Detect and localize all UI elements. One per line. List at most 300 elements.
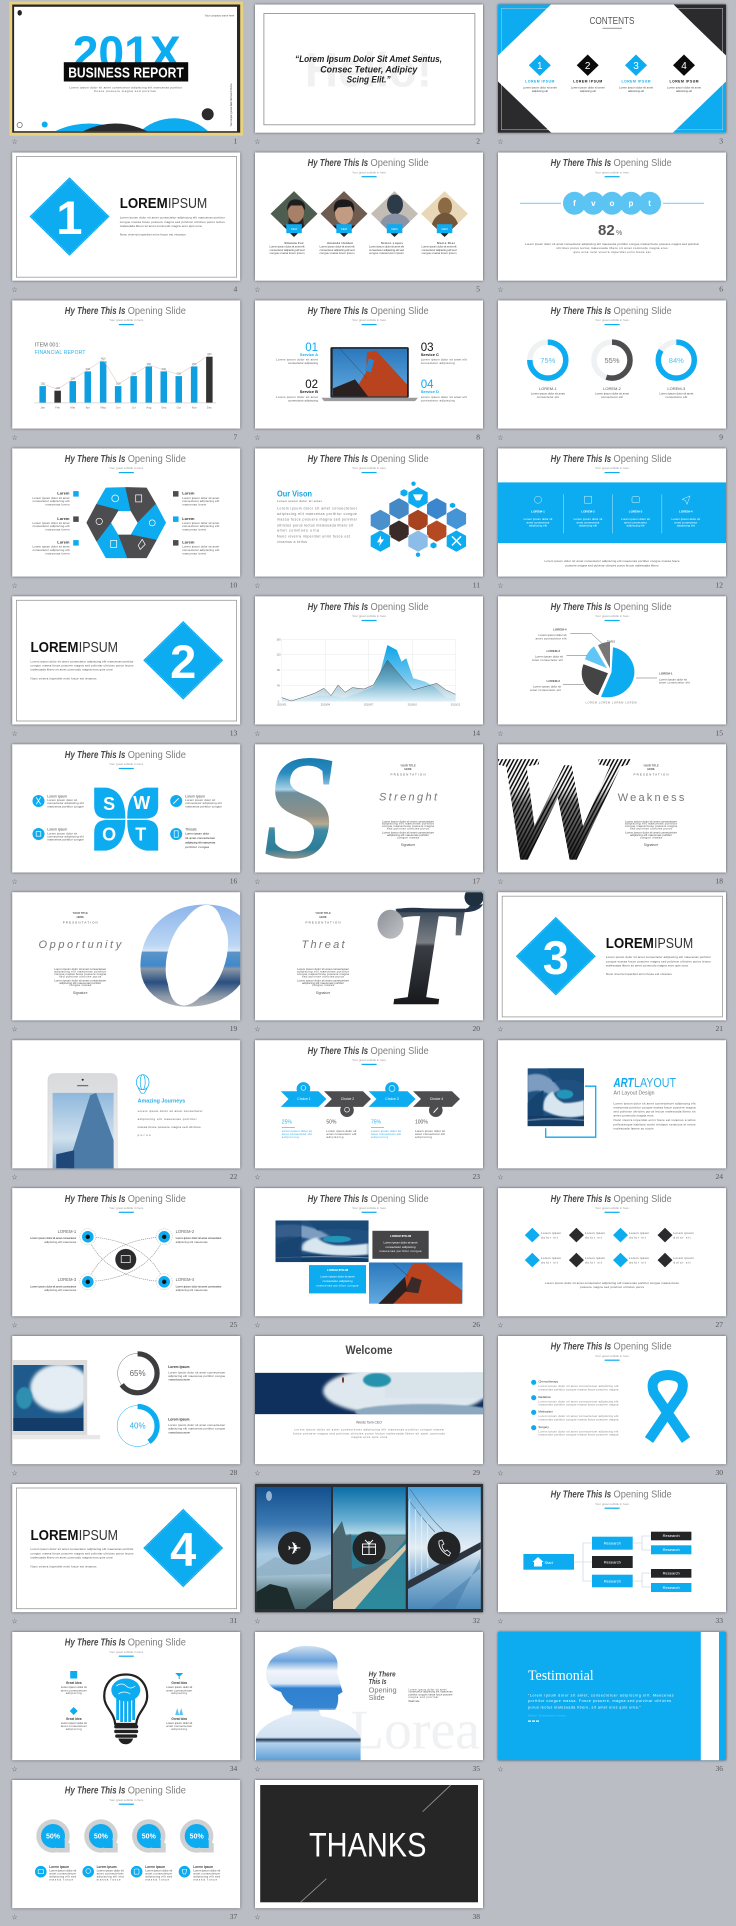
slide number: ☆ — [497, 434, 504, 442]
section text: malesuada libero sit amet commodo magna eros quis urna — [30, 1555, 113, 1559]
right labels: maecenas lorem — [182, 551, 207, 555]
slide number: ☆ — [497, 286, 504, 294]
description: Lorem ipsum dolor sit amet consectetur adipiscing elit maecenas porttitor congue massa fusce posuere magna sed pulvinar — [525, 242, 699, 246]
slide number: 16 — [230, 876, 237, 885]
body text: Lorem ipsum dolor sit amet — [408, 1687, 447, 1691]
section title — [30, 1527, 118, 1544]
art layout title: ART — [613, 1075, 634, 1090]
service 02: 02 — [305, 379, 318, 391]
laptop with bridge photo — [322, 347, 418, 401]
item 4: Lorem Ipsum — [193, 1865, 213, 1869]
slide number: ☆ — [11, 434, 18, 442]
threats item: Threats — [185, 827, 197, 831]
heading: Opening Slide — [370, 1193, 429, 1205]
slide number: 27 — [716, 1320, 723, 1329]
item 2: Lorem Ipsum — [97, 1865, 117, 1869]
area chart: 2010/07 — [364, 702, 374, 706]
label lorem 2: LOREM-2 — [176, 1229, 195, 1234]
slide sheet — [255, 744, 483, 872]
title: Opening — [369, 1686, 397, 1694]
feature text: massa fusce posuere magna sed ultricies — [138, 1125, 201, 1129]
step 25 percent: amet consectetur elit — [282, 1132, 312, 1136]
donut labels: consectetur elit — [665, 395, 687, 399]
donut labels: consectetur elit — [537, 395, 559, 399]
social circles: o — [610, 199, 615, 208]
step 75 percent: amet consectetur elit — [371, 1132, 401, 1136]
quote text: porttitor congue massa. Fusce posuere, magna sed pulvinar ultricies — [528, 1699, 671, 1703]
phone mockup — [48, 1074, 117, 1168]
contents item 3: 3 — [633, 61, 639, 72]
chevron process: Choice 4 — [430, 1097, 443, 1101]
slide number: 12 — [716, 580, 723, 589]
hexagon icons — [96, 495, 155, 549]
idea bottom right: Lorem ipsum dolor sit — [166, 1721, 192, 1725]
member text 4: congue massa lorem ipsum — [422, 251, 457, 255]
donut labels — [531, 386, 693, 399]
quote: Consec Tetuer, Adipicy — [320, 64, 418, 74]
body text: sed pulvinar ultricies purus — [387, 827, 430, 831]
portrait 4 — [421, 191, 468, 234]
body text — [625, 819, 677, 847]
swot letters: O — [102, 825, 116, 845]
slide 6: social percentage — [497, 152, 726, 294]
callout lorem 1: Lorem ipsum dolor sit — [659, 677, 687, 681]
treatment item 3: Lorem ipsum dolor sit amet consectetuer adipiscing elit — [538, 1414, 619, 1418]
slide sheet — [12, 448, 240, 577]
heading: Hy There This Is — [308, 305, 368, 317]
big photo letter T: T — [383, 874, 465, 1036]
idea bottom left — [61, 1707, 87, 1731]
slide number — [254, 1172, 480, 1182]
callout lorem 3: LOREM-3 — [546, 649, 560, 653]
item 4 — [179, 1865, 221, 1881]
contents item 1: Lorem ipsum dolor sit amet — [523, 86, 557, 90]
slide sheet — [12, 892, 240, 1020]
big photo letter O — [140, 904, 240, 1007]
service 02: consectetur adipiscing — [288, 399, 318, 403]
bubble 2 — [84, 1819, 118, 1853]
slide number: 31 — [230, 1616, 237, 1625]
body text: congue massa fusce posuere magna — [297, 972, 349, 976]
idea top right — [166, 1673, 192, 1695]
ring text 2 — [168, 1418, 226, 1434]
slide number: ☆ — [497, 582, 504, 590]
item 1: Lorem Ipsum — [49, 1865, 69, 1869]
body text — [297, 967, 349, 995]
slide number — [11, 1764, 237, 1774]
treatment item 4: Surgery — [538, 1425, 549, 1429]
phone icon — [428, 1532, 460, 1564]
item 2: amet consectetuer — [97, 1872, 124, 1876]
number diamond — [143, 1509, 223, 1587]
slide 34: light bulb ideas — [11, 1632, 240, 1774]
research boxes right — [651, 1532, 691, 1592]
footnote — [544, 559, 680, 567]
slide number: ☆ — [11, 878, 18, 886]
slide number — [254, 284, 480, 294]
slide number — [497, 580, 723, 590]
donut labels: LOREM-2 — [603, 386, 622, 391]
section text: Lorem ipsum dolor sit amet consectetur adipiscing elit maecenas porttitor — [30, 1547, 133, 1551]
label lorem 1: Lorem ipsum dolor sit amet consectetur — [30, 1236, 76, 1240]
heading: Opening Slide — [128, 749, 186, 761]
slide 30: ribbon — [497, 1336, 726, 1478]
item 2: massa fusce — [97, 1877, 121, 1881]
slide number: ☆ — [254, 1766, 261, 1774]
treatment item 2: Lorem ipsum dolor sit amet consectetuer adipiscing elit — [538, 1399, 619, 1403]
contents item 3: LOREM IPSUM — [622, 80, 651, 84]
body text: adipiscing elit maecenas porttitor — [387, 833, 429, 837]
item 2: adipiscing elit sed — [97, 1874, 124, 1878]
contents item 3: adipiscing elit — [628, 89, 644, 93]
dark caption box — [372, 1231, 429, 1259]
chevron process: Choice 3 — [385, 1097, 399, 1101]
body text: congue massa — [397, 835, 419, 839]
testimonial heading: Testimonial — [528, 1668, 594, 1684]
slide sheet — [12, 1336, 240, 1464]
slide number: ☆ — [11, 1618, 18, 1626]
area chart: 2010/04 — [321, 702, 331, 706]
threats item: adipiscing elit maecenas — [185, 841, 216, 845]
slide sheet — [12, 596, 240, 724]
section title: IPSUM — [654, 935, 693, 952]
bar chart: 300 — [85, 367, 91, 371]
slide 22: phone — [11, 1040, 240, 1182]
body text: Lorem ipsum dolor sit amet consectetuer — [625, 819, 677, 823]
heading — [308, 305, 429, 325]
blue bracket — [546, 1086, 596, 1137]
chart title: FINANCIAL REPORT — [35, 350, 85, 356]
label lorem 4: Lorem ipsum dolor sit amet consectetur — [176, 1284, 222, 1288]
callout lorem 2: Lorem ipsum dolor sit — [533, 685, 561, 689]
threats item: porttitor congue — [185, 845, 210, 849]
CEO tag 3: CEO — [391, 227, 398, 231]
diamond row 2: Lorem ipsum — [629, 1256, 650, 1260]
heading — [65, 1785, 186, 1805]
heading: Opening Slide — [370, 157, 429, 169]
section text: Lorem ipsum dolor sit amet consectetur adipiscing elit maecenas porttitor — [606, 955, 711, 959]
body text: congue massa fusce posuere magna — [54, 972, 107, 976]
slide sheet — [255, 1632, 483, 1760]
idea top right: Lorem ipsum dolor sit — [166, 1685, 192, 1689]
bar chart: Feb — [55, 406, 61, 410]
right labels: maecenas lorem — [182, 528, 207, 532]
social circles — [563, 192, 661, 215]
title block: YOUR TITLE — [315, 911, 331, 915]
slide number: ☆ — [11, 1470, 18, 1478]
diagonal accents — [300, 1785, 451, 1902]
body text: Lorem ipsum dolor sit amet consectetuer — [382, 819, 434, 823]
idea top right: adipiscing — [171, 1691, 188, 1695]
slide number: 6 — [719, 284, 723, 294]
member text 2 — [320, 241, 355, 255]
slide 4: section one — [11, 152, 240, 294]
body text: Signature — [73, 991, 88, 995]
step 100 percent: adipiscing — [415, 1135, 432, 1139]
slide number — [254, 876, 480, 886]
slide number — [254, 136, 480, 146]
left labels: maecenas lorem — [45, 528, 70, 532]
strength item: Lorem Ipsum — [47, 794, 67, 798]
slide 32: three photo panels — [254, 1484, 483, 1626]
footnote: posuere magna sed pulvinar ultricies purus lectus malesuada libero — [566, 563, 659, 567]
band column 1: LOREM-1 — [531, 509, 545, 513]
section text: congue massa fusce posuere magna sed pulvinar ultricies purus lectus — [120, 220, 225, 224]
member text 3: congue massa lorem ipsum — [369, 251, 404, 255]
dark caption box: Lorem ipsum dolor sit amet — [384, 1240, 418, 1244]
slide number: 32 — [472, 1616, 480, 1625]
slide sheet — [255, 892, 483, 1020]
heading: Your great subtitle in here — [595, 1206, 629, 1210]
body text: sed pulvinar ultricies purus lectus malesuada libero sit — [614, 1109, 696, 1113]
heading: Hy There This Is — [308, 1045, 368, 1057]
ring 65 percent: 65% — [130, 1369, 146, 1378]
contents item 2: 2 — [585, 61, 591, 72]
quote text: purus lectus malesuada libero, sit amet eros quis urna.” — [528, 1706, 641, 1710]
slide sheet — [498, 300, 726, 429]
member text 4: Lorem ipsum dolor sit amet elit — [422, 244, 457, 248]
body text: adipiscing elit maecenas porttitor — [297, 970, 349, 974]
slide 25: crossing loops — [11, 1188, 240, 1330]
section title — [30, 639, 118, 656]
callout lorem 2: LOREM-2 — [546, 679, 560, 683]
bar chart — [34, 352, 216, 410]
slide 31: section four — [11, 1484, 240, 1626]
service 02: Lorem ipsum dolor sit amet — [276, 395, 318, 399]
item 4: adipiscing elit sed — [193, 1874, 221, 1878]
slide number: ☆ — [497, 1618, 504, 1626]
big photo letter O: O — [134, 870, 258, 1038]
slide number: ☆ — [254, 1914, 261, 1922]
keyword: Threat — [302, 939, 345, 951]
number diamond — [143, 621, 223, 700]
heading: Opening Slide — [614, 1193, 672, 1205]
pie chart: LOREM LOREM LOREM LOREM — [586, 700, 636, 704]
slide number: 2 — [476, 136, 480, 146]
right labels: Lorem — [182, 540, 195, 545]
left labels: consectetur adipiscing elit — [32, 524, 70, 528]
slide 5: team — [254, 152, 483, 294]
heading: Your great subtitle in here — [595, 1502, 629, 1506]
slide number — [497, 284, 723, 294]
item 1: adipiscing elit sed — [49, 1874, 77, 1878]
slide number — [11, 1172, 237, 1182]
title — [369, 1670, 397, 1702]
section text: malesuada libero sit amet commodo magna eros quis urna — [606, 964, 688, 968]
heading: Opening Slide — [128, 1785, 186, 1797]
research boxes right: Research — [663, 1585, 680, 1590]
donut 84 percent — [658, 342, 694, 378]
research boxes middle: Research — [604, 1540, 621, 1546]
pie chart — [582, 639, 636, 704]
chevron process — [281, 1091, 460, 1107]
CEO tag 2 — [336, 224, 352, 237]
step 25 percent — [282, 1120, 312, 1139]
ring text 1: massa fusce posuere — [168, 1378, 191, 1382]
bar chart: 100 — [55, 386, 60, 390]
step 75 percent: Lorem ipsum dolor sit — [371, 1129, 401, 1133]
band column 4: adipiscing elit — [677, 524, 695, 528]
heading: Your great subtitle in here — [109, 1650, 144, 1654]
number diamond — [516, 917, 596, 996]
contents item 1: 1 — [537, 61, 543, 72]
slide sheet — [498, 1188, 726, 1316]
treatment item 3: maecenas porttitor congue massa fusce posuere magna — [538, 1417, 619, 1421]
heading: Your great subtitle in here — [352, 318, 386, 322]
heading: Your great subtitle in here — [109, 466, 144, 470]
chevron process: Choice 1 — [297, 1097, 311, 1101]
weakness item: maecenas porttitor congue — [185, 804, 222, 808]
social circles: p — [629, 199, 634, 208]
body text: adipiscing elit maecenas porttitor — [625, 822, 677, 826]
slide number: ☆ — [254, 878, 261, 886]
title block: YOUR TITLE — [643, 763, 659, 767]
area chart: 40 — [277, 684, 280, 688]
heading: Your great subtitle in here — [352, 614, 386, 618]
slide sheet — [12, 1632, 240, 1760]
slide 19: opportunity — [10, 890, 242, 1032]
swot letters — [102, 793, 150, 845]
bar chart: 350 — [146, 362, 152, 366]
slide sheet — [12, 1484, 240, 1612]
left labels: consectetur adipiscing elit — [32, 499, 70, 503]
band column 1: Lorem ipsum dolor sit — [524, 517, 552, 521]
body text — [408, 1687, 453, 1703]
body text: Nunc viverra imperdiet enim fusce est vivamus a tellus — [614, 1118, 696, 1122]
right labels: consectetur adipiscing elit — [182, 524, 219, 528]
ring text 2: Lorem Ipsum — [168, 1418, 189, 1422]
slide sheet — [12, 1040, 240, 1168]
slide 15: pie chart — [497, 596, 726, 738]
art layout title — [613, 1075, 676, 1090]
bar chart: 450 — [207, 352, 212, 356]
slide number: 34 — [230, 1764, 237, 1773]
band column 2: amet consectetur — [576, 520, 600, 524]
contents item 3: Lorem ipsum dolor sit amet — [619, 86, 653, 90]
heading: Hy There This Is — [308, 157, 368, 169]
label lorem 3: Lorem ipsum dolor sit amet consectetur — [30, 1284, 76, 1288]
slide number: 24 — [716, 1172, 723, 1181]
contents item 4: adipiscing elit — [676, 89, 692, 93]
slide number: 1 — [233, 136, 237, 146]
idea bottom right: amet consectetuer — [166, 1724, 192, 1728]
slide sheet — [12, 744, 240, 872]
slide number: 22 — [230, 1172, 237, 1181]
section text: Nunc viverra imperdiet enim fusce est vivamus — [30, 1564, 97, 1568]
heading: Opening Slide — [128, 305, 186, 317]
slide number: 37 — [230, 1912, 237, 1921]
wave photo — [528, 1068, 584, 1126]
bar chart: 350 — [192, 362, 197, 366]
contents item 1: LOREM IPSUM — [525, 80, 554, 84]
slide sheet — [12, 1188, 240, 1316]
CEO tag 1 — [286, 224, 302, 237]
heading: Your great subtitle in here — [109, 1206, 144, 1210]
slide number — [497, 728, 723, 738]
member text 1: congue massa lorem ipsum — [270, 251, 305, 255]
slide sheet — [498, 744, 726, 872]
footnote: Lorem ipsum dolor sit amet consectetur adipiscing elit maecenas porttitor congue massa fusce — [544, 559, 680, 563]
slide number: ☆ — [254, 286, 261, 294]
heading: Your great subtitle in here — [595, 614, 629, 618]
slide 12: blue band — [497, 448, 726, 590]
connectors — [574, 1536, 651, 1587]
corner shapes — [498, 4, 726, 133]
feature text: Lorem ipsum dolor sit amet consectetur — [138, 1109, 203, 1113]
heading: CONTENTS — [590, 16, 635, 27]
slide number: 14 — [472, 728, 480, 737]
section title — [606, 935, 693, 952]
hexagon cluster — [370, 482, 466, 557]
vision text: Lorem ipsum dolor sit amet — [277, 499, 322, 503]
bar chart: Aug — [146, 406, 152, 410]
section text: Nunc viverra imperdiet enim fusce est vivamus — [606, 972, 672, 976]
label lorem 2: adipiscing elit maecenas — [176, 1240, 208, 1244]
slide number: 29 — [472, 1468, 480, 1477]
keyword: Weakness — [618, 792, 685, 804]
slide 24: art layout — [497, 1040, 726, 1182]
portrait 3 — [371, 191, 418, 234]
portrait 1 — [270, 191, 318, 234]
welcome heading: Welcome — [346, 1343, 393, 1357]
step 50 percent: Lorem ipsum dolor sit — [326, 1129, 357, 1133]
heading: Opening Slide — [370, 305, 429, 317]
label lorem 3 — [30, 1277, 77, 1292]
slide number: 18 — [716, 876, 723, 885]
heading: Opening Slide — [128, 1193, 186, 1205]
bubble 1 — [36, 1819, 70, 1853]
bar chart: Nov — [192, 406, 197, 410]
diamond row 1: dolor sit — [585, 1235, 602, 1239]
big photo letter W: W — [486, 724, 632, 890]
heading: Opening Slide — [614, 305, 672, 317]
item 3: Lorem Ipsum — [145, 1865, 165, 1869]
callout lorem 4 — [536, 628, 606, 647]
section title — [120, 195, 207, 212]
band column 2: LOREM-2 — [581, 509, 595, 513]
donut 84 percent: 84% — [669, 356, 684, 365]
thanks text: THANKS — [309, 1826, 426, 1864]
label lorem 2: Lorem ipsum dolor sit amet consectetur — [176, 1236, 222, 1240]
swot letters: W — [133, 793, 150, 813]
plane icon: ✈ — [287, 1539, 302, 1559]
heading: Hy There This Is — [551, 305, 611, 317]
body text — [54, 967, 107, 995]
body text: adipiscing elit maecenas porttitor — [382, 822, 434, 826]
bridge panel — [408, 1487, 481, 1609]
slide number: 4 — [233, 284, 237, 294]
heading — [308, 1193, 429, 1213]
slide number: ☆ — [11, 730, 18, 738]
heading: Hy There This Is — [551, 157, 611, 169]
diamond row 2: Lorem ipsum — [541, 1256, 562, 1260]
dark caption box: maecenas porttitor congue — [380, 1249, 422, 1253]
slide sheet — [498, 892, 726, 1020]
heading: Your great subtitle in here — [352, 1058, 386, 1062]
donut labels: LOREM-3 — [667, 386, 686, 391]
blue caption box: Lorem ipsum dolor sit amet — [320, 1275, 355, 1279]
slide number — [11, 728, 237, 738]
member text 3 — [369, 241, 404, 255]
bar chart: Oct — [177, 406, 181, 410]
slide frame — [12, 4, 240, 133]
art layout title: LAYOUT — [634, 1075, 676, 1090]
band column 4: LOREM-4 — [679, 509, 693, 513]
research boxes middle: Research — [604, 1559, 621, 1564]
section text — [30, 1547, 134, 1568]
laptop with wave — [12, 1360, 100, 1439]
diamond row 1: Lorem ipsum — [541, 1231, 562, 1235]
